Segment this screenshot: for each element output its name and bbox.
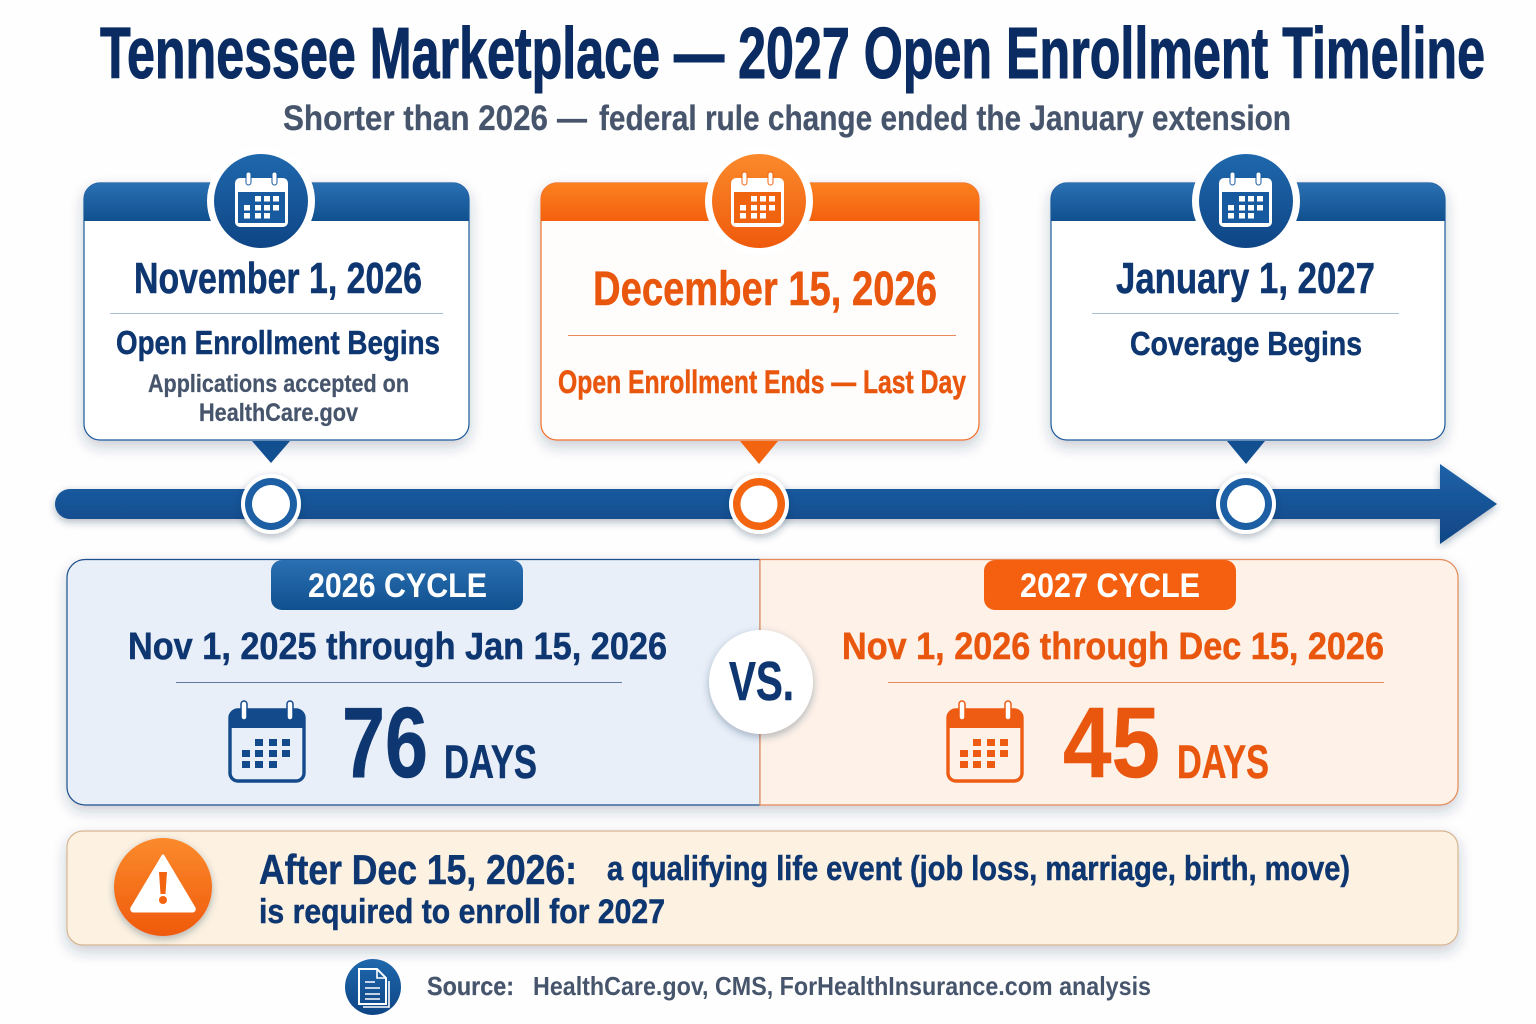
label: Open Enrollment Begins: Open Enrollment Begins (116, 324, 440, 361)
callout: deadline warning (67, 831, 1458, 945)
panel: 2027 cycle (760, 560, 1458, 805)
stat: 45 days: DAYS (1177, 735, 1269, 788)
pointer: card to timeline (740, 441, 778, 464)
callout body: a qualifying life event (job loss, marriage, birth, move) (607, 850, 1350, 888)
panel: November 1, 2026 milestone (84, 147, 469, 463)
description: applications: HealthCare.gov (199, 399, 358, 427)
stat: 45 days: 45 (1063, 687, 1160, 799)
panel: 2026 cycle (67, 560, 760, 805)
callout heading: After Dec 15, 2026: (259, 846, 577, 893)
node: November 1 (241, 474, 301, 534)
node: January 1 (1216, 474, 1276, 534)
stat: 76 days (342, 687, 537, 799)
label: Open Enrollment Ends: Open Enrollment Ends — Last Day (558, 364, 966, 400)
dates: 2026 cycle: Nov 1, 2025 through Jan 15, 2026 (128, 626, 667, 668)
date: November 1, 2026: November 1, 2026 (134, 254, 422, 303)
subtitle: — (557, 99, 587, 138)
icon: calendar in blue circle (1192, 147, 1300, 255)
callout body (259, 850, 1350, 931)
badge: 2027 cycle: 2027 CYCLE (1020, 567, 1200, 605)
dates: 2027 cycle: Nov 1, 2026 through Dec 15, 2026 (842, 626, 1384, 668)
label: Coverage Begins: Coverage Begins (1130, 325, 1362, 362)
icon: calendar in blue circle (207, 147, 315, 255)
source line (345, 959, 1151, 1015)
date: December 15, 2026: December 15, 2026 (593, 263, 937, 316)
panel: December 15, 2026 milestone (541, 147, 979, 464)
icon: document (345, 959, 401, 1015)
pointer: card to timeline (1227, 441, 1265, 464)
stat: 45 days (1063, 687, 1269, 799)
subtitle: federal rule change ended the January extension (599, 99, 1291, 138)
date: January 1, 2027: January 1, 2027 (1116, 254, 1375, 303)
callout body: is required to enroll for 2027 (259, 893, 665, 931)
timeline arrow (55, 464, 1497, 544)
badge: 2026 cycle (271, 560, 523, 610)
pointer: card to timeline (252, 441, 290, 463)
badge: VS. (709, 630, 813, 734)
comparison panel (67, 559, 1458, 805)
badge: 2026 cycle: 2026 CYCLE (308, 567, 487, 605)
icon: warning triangle (114, 838, 212, 936)
stat: 76 days: DAYS (444, 735, 537, 788)
description: applications: Applications accepted on (148, 370, 409, 398)
icon: calendar in orange circle (705, 147, 813, 255)
node: December 15 (729, 474, 789, 534)
badge: 2027 cycle (984, 560, 1236, 610)
description: applications (148, 370, 409, 427)
subtitle: Shorter than 2026 (283, 99, 548, 138)
source text: HealthCare.gov, CMS, ForHealthInsurance.com analysis (533, 971, 1151, 1001)
icon: calendar (948, 701, 1022, 781)
panel: January 1, 2027 milestone (1051, 147, 1445, 464)
badge: VS.: VS. (729, 650, 794, 712)
subtitle (283, 99, 1291, 138)
icon: calendar (230, 701, 304, 781)
stat: 76 days: 76 (342, 687, 428, 799)
source label: Source: (427, 971, 514, 1001)
